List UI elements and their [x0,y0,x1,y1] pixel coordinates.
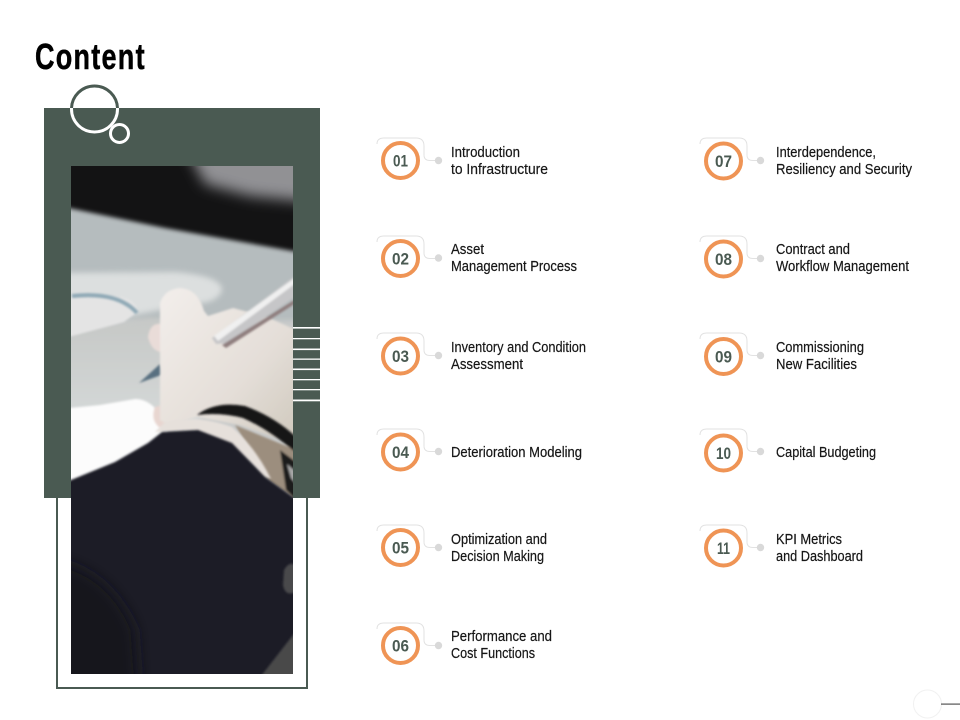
pen barrel [212,275,296,348]
item 05: 05 [392,538,409,558]
item 09: Commissioning [776,339,864,356]
item 07: 07 [715,152,732,171]
page number marker [914,690,960,718]
item 04 [377,429,582,470]
jacket [71,428,293,674]
item 06 [377,623,552,663]
item 11: KPI Metrics [776,531,842,548]
hand [148,288,296,445]
stripes beside photo [293,327,320,401]
item 04: 04 [392,443,409,462]
item 07: Interdependence, [776,144,876,161]
item 01: to Infrastructure [451,161,548,178]
item 02: Asset [451,241,485,258]
item 03 [377,333,586,374]
item 06: Performance and [451,628,552,645]
item 08: 08 [715,250,732,269]
item 03: 03 [392,347,409,366]
item 03: Assessment [451,356,524,373]
item 07: Resiliency and Security [776,161,912,178]
item 02: 02 [392,250,409,268]
item 05 [377,525,547,565]
item 09: 09 [715,348,732,366]
item 10 [700,429,876,470]
bracelet and wrist [197,405,296,500]
item 06: Cost Functions [451,645,535,662]
item 02 [377,236,577,276]
green panel [44,108,320,498]
item 07 [700,138,912,178]
item 05: Decision Making [451,548,544,565]
item 11: 11 [717,539,730,558]
item 05: Optimization and [451,531,547,548]
shirt cuff [155,419,271,479]
item 11: and Dashboard [776,548,863,565]
item 08 [700,236,910,276]
item 03: Inventory and Condition [451,339,586,356]
item 08: Contract and [776,241,850,258]
item 01: 01 [393,152,408,170]
item 09: New Facilities [776,356,857,373]
outline frame behind panel [57,400,307,688]
item 10: Capital Budgeting [776,444,876,461]
item 08: Workflow Management [776,258,910,275]
photo: hand writing with pen [71,166,293,674]
item 01: Introduction [451,144,520,161]
item 01 [377,138,548,178]
item 10: 10 [716,444,731,463]
pen tip [139,364,164,383]
icon: decorative circles [72,86,128,142]
item 11 [700,525,863,566]
title: Content [35,36,146,77]
notebook [71,398,168,481]
item 09 [700,333,864,374]
item 02: Management Process [451,258,577,275]
item 04: Deterioration Modeling [451,444,582,461]
item 06: 06 [392,636,409,656]
